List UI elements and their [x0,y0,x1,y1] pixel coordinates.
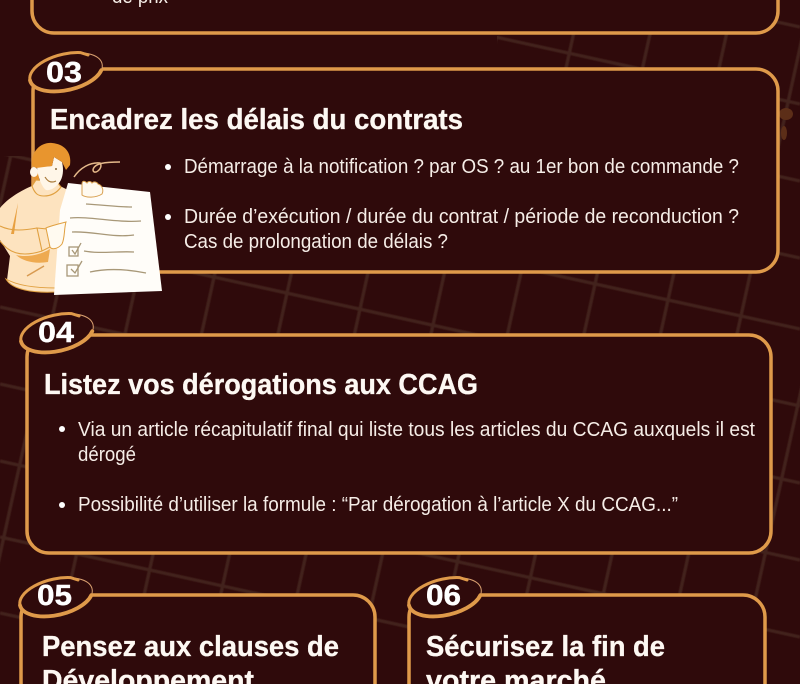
collar [32,180,61,196]
bullet 03-1: Démarrage à la notification ? par OS ? au 1er bon de commande ? [184,156,739,178]
cuff [37,228,50,251]
hair [32,143,70,170]
arm outline [0,226,42,254]
sweater hem [6,279,56,292]
badge: 06: 06 [426,580,461,612]
panel: previous section (cropped) [32,0,778,33]
bullet 04-2: Possibilité d’utiliser la formule : “Par dérogation à l’article X du CCAG...” [78,494,678,516]
face [37,157,63,190]
badge: 03 [26,46,106,98]
icon: person holding checklist [0,143,162,295]
bullet 03-2 [165,206,739,253]
panel: 05 clauses [21,595,375,684]
checklist lines [67,204,146,276]
hair back [33,170,40,188]
sweater shading [11,203,18,234]
bullet 03-2: Cas de prolongation de délais ? [184,231,448,253]
panel: 04 dérogations [27,335,771,553]
squiggle [74,162,120,177]
sweater [0,185,68,292]
bullet 04-1: dérogé [78,444,136,466]
heading: 03: Encadrez les délais du contrats [50,104,463,136]
panel: 06 fin de marché [409,595,765,684]
pointing hand [46,222,66,249]
bullet 04-1 [59,419,755,466]
badge: 06 [405,571,485,623]
heading: 04: Listez vos dérogations aux CCAG [44,369,478,401]
top hand [82,181,103,197]
bullet 03-2: Durée d’exécution / durée du contrat / période de reconduction ? [184,206,739,228]
heading: 06: Sécurisez la fin de [426,631,665,663]
panel: 03 délais [33,69,778,272]
badge: 03: 03 [46,57,82,89]
heading: 05: Pensez aux clauses de [42,631,339,663]
badge: 05: 05 [37,580,72,612]
badge: 04: 04 [38,317,74,349]
decorative faded blob behind panel 03 [779,108,793,140]
badge: 04 [17,307,97,359]
paper [54,183,162,295]
badge: 05 [16,571,96,623]
bullet 04-1: Via un article récapitulatif final qui liste tous les articles du CCAG auxquels il est [78,419,755,441]
